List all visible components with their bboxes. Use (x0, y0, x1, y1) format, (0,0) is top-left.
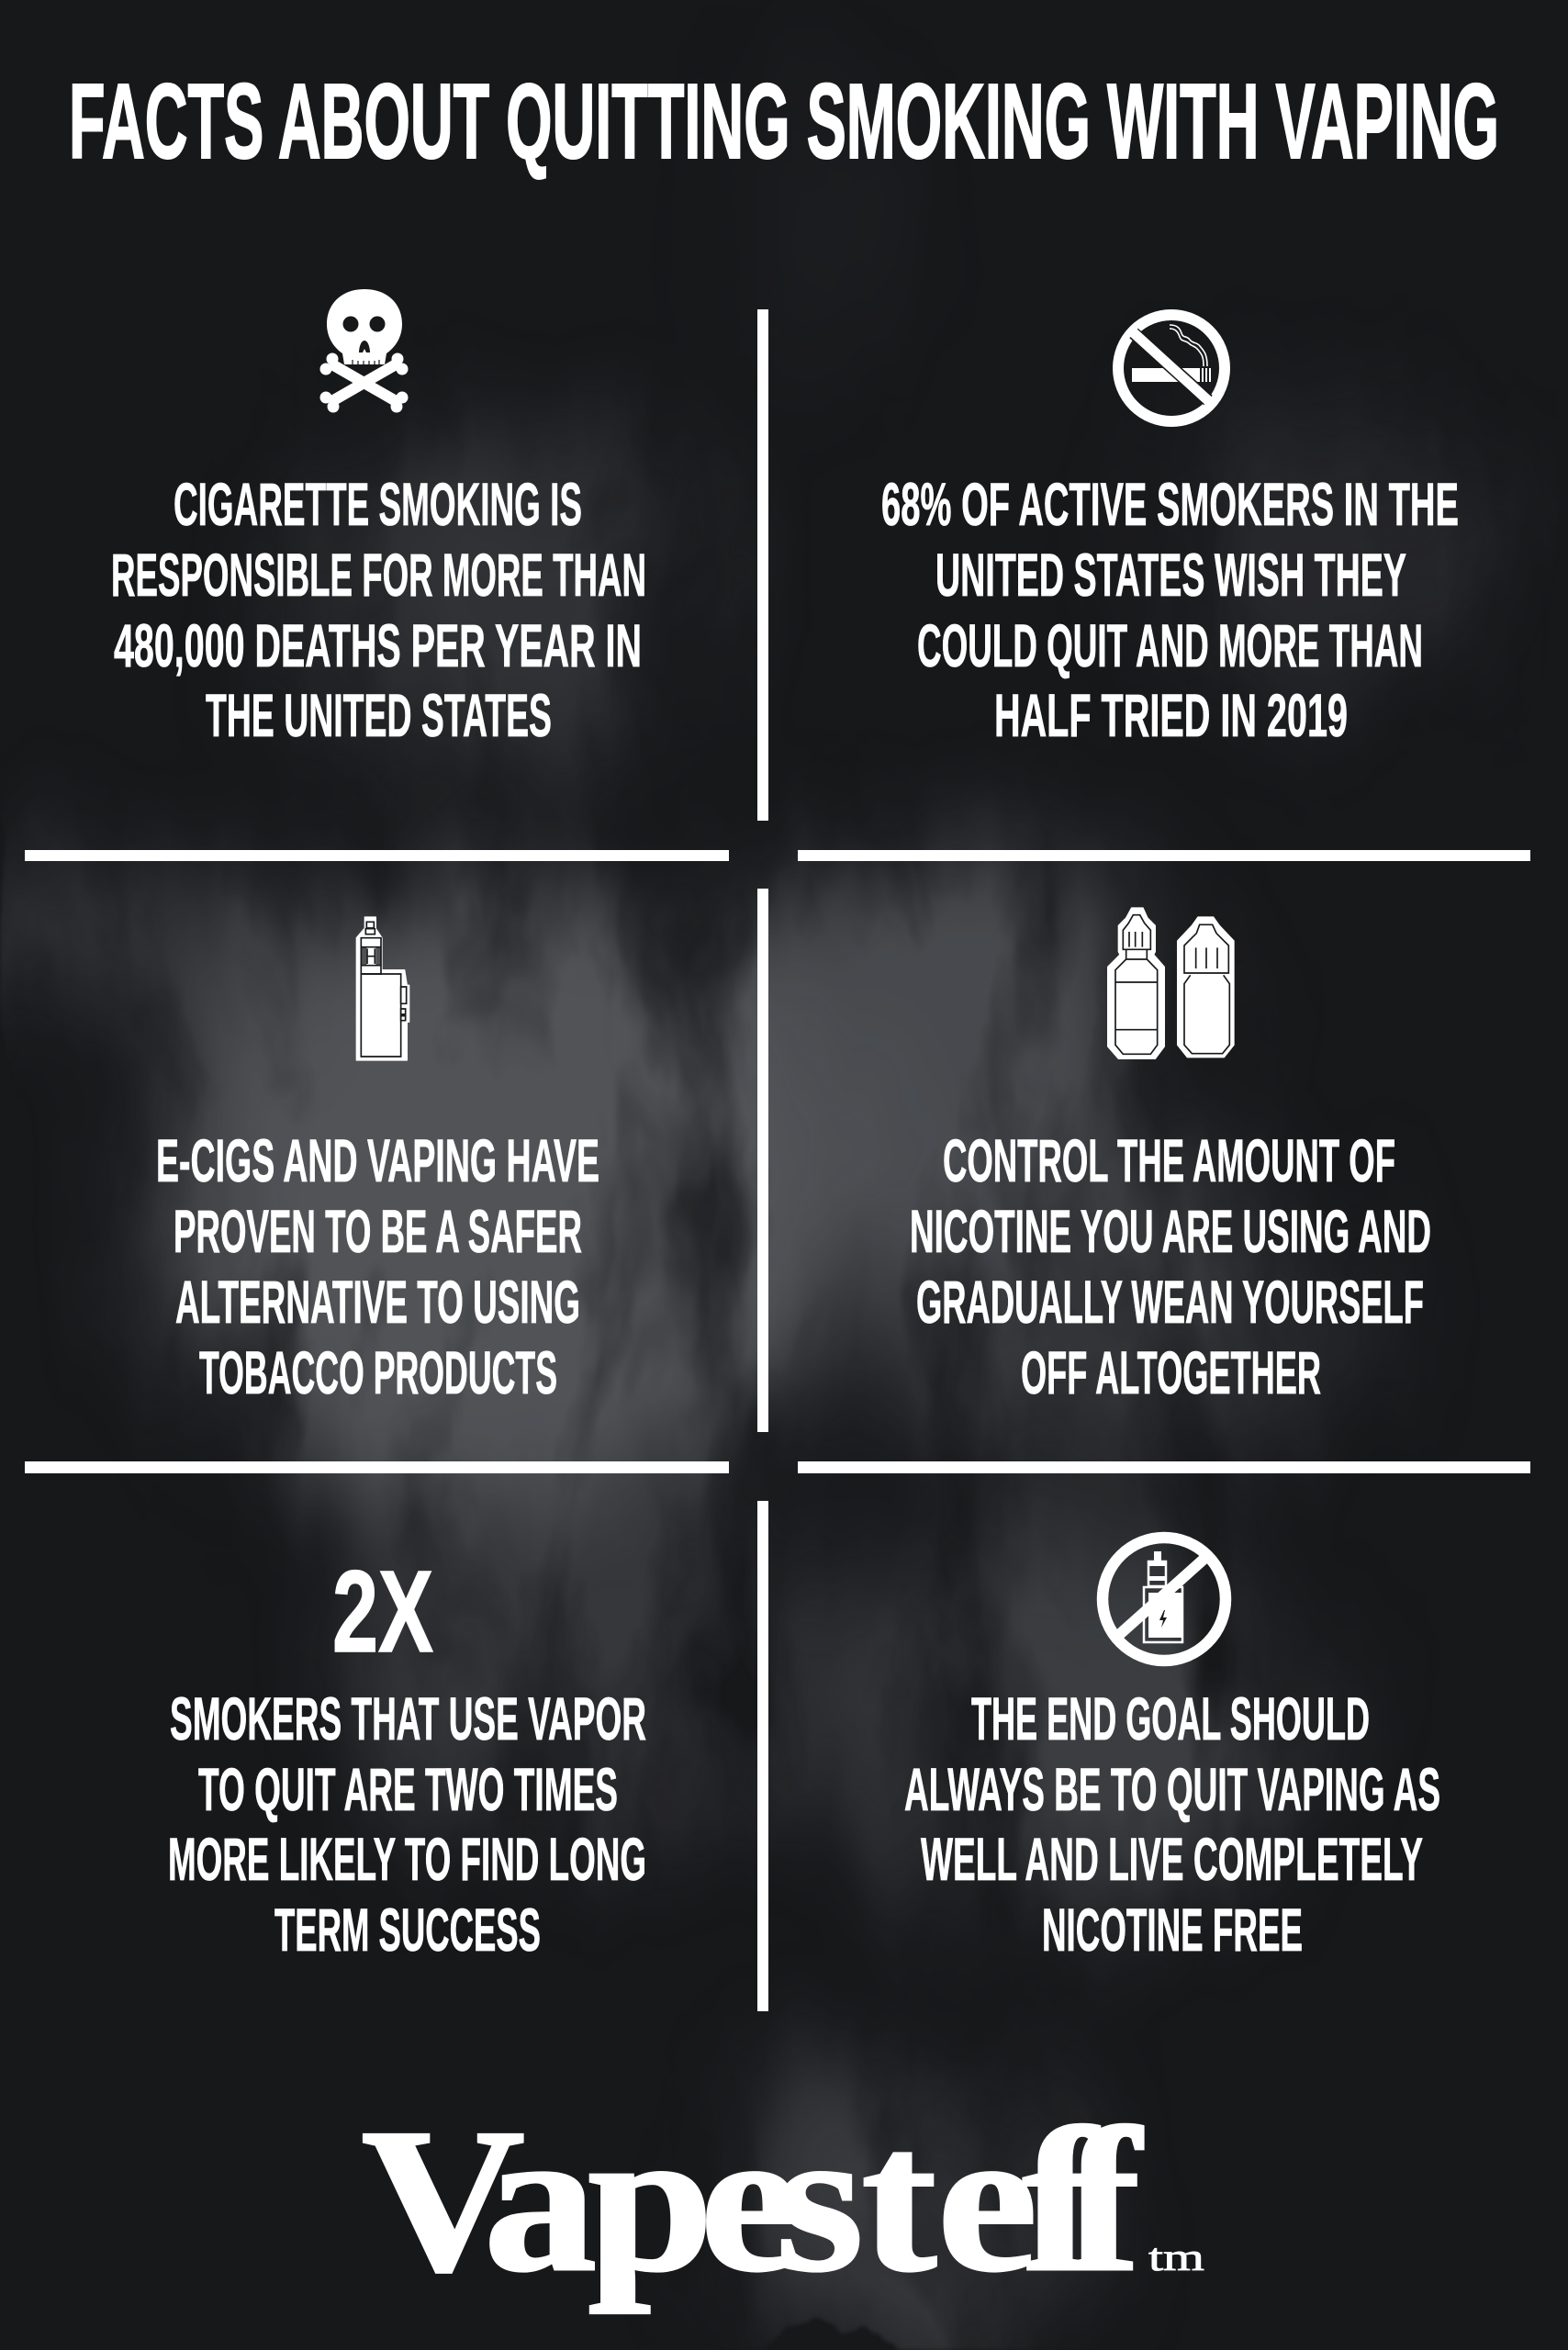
panel: cigarette deaths (111, 289, 646, 749)
text: safer alternative: TOBACCO PRODUCTS (199, 1338, 557, 1406)
icon: no vaping (1103, 1538, 1226, 1661)
text: wish to quit (881, 470, 1459, 749)
text: cigarette deaths: 480,000 DEATHS PER YEAR IN (114, 611, 642, 679)
text: cigarette deaths: CIGARETTE SMOKING IS (174, 470, 582, 538)
text: safer alternative: ALTERNATIVE TO USING (175, 1268, 580, 1336)
text: wish to quit: HALF TRIED IN 2019 (994, 681, 1348, 749)
text: cigarette deaths: RESPONSIBLE FOR MORE THAN (111, 541, 646, 609)
text: safer alternative: E-CIGS AND VAPING HAVE (156, 1126, 599, 1194)
text: end goal (904, 1684, 1440, 1964)
icon: box mod vape (356, 917, 409, 1060)
icon: no smoking (1118, 315, 1225, 421)
text: cigarette deaths (111, 470, 646, 749)
panel: wish to quit (881, 315, 1459, 749)
text: two times more likely (168, 1684, 646, 1964)
text: safer alternative: PROVEN TO BE A SAFER (174, 1197, 582, 1265)
text: safer alternative (156, 1126, 599, 1406)
text: two times more likely: TERM SUCCESS (274, 1896, 541, 1964)
text: cigarette deaths: THE UNITED STATES (206, 681, 552, 749)
text: control nicotine (910, 1126, 1431, 1406)
panel: control nicotine (910, 908, 1431, 1406)
icon: skull and crossbones (319, 289, 408, 413)
big number 2X: 2X (332, 1547, 433, 1676)
logo: Vapesteff: tm (1148, 2237, 1204, 2279)
logo: Vapesteff: Vapesteff (362, 2086, 1143, 2314)
text: two times more likely: TO QUIT ARE TWO TIMES (198, 1755, 618, 1823)
text: control nicotine: OFF ALTOGETHER (1021, 1338, 1321, 1406)
panel: two times more likely (168, 1547, 646, 1964)
icon: e-liquid bottles (1108, 908, 1234, 1058)
divider lines (25, 309, 1530, 2011)
text: end goal: NICOTINE FREE (1042, 1896, 1303, 1964)
panel: safer alternative (156, 917, 599, 1406)
panel: end goal (904, 1538, 1440, 1964)
text: two times more likely: MORE LIKELY TO FIND LONG (168, 1825, 646, 1893)
text: two times more likely: SMOKERS THAT USE VAPOR (170, 1684, 646, 1752)
